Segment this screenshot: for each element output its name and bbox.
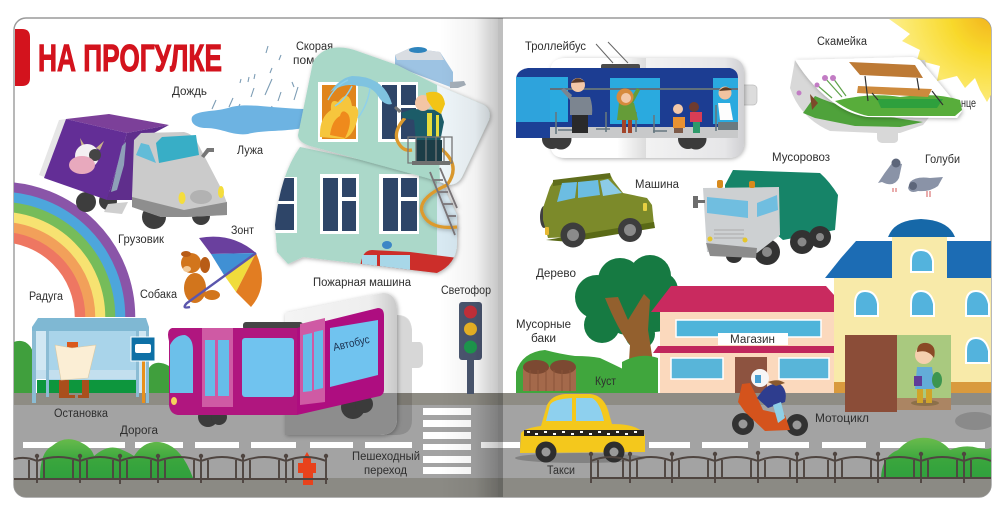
children	[673, 102, 702, 133]
street: pavement and road	[14, 393, 991, 497]
cab	[703, 187, 780, 253]
labels: left page: Дорога	[120, 425, 159, 437]
trolleybus	[516, 42, 738, 150]
labels: left page: Лужа	[237, 145, 264, 157]
ambulance card peeking	[395, 47, 466, 88]
labels hidden behind cards	[294, 42, 332, 64]
bushes behind bus stop	[14, 341, 169, 393]
awning	[653, 346, 834, 353]
boy	[911, 343, 942, 406]
man with newspaper	[55, 342, 96, 398]
labels: left page: Радуга	[29, 291, 64, 303]
card base	[790, 60, 935, 143]
fence	[589, 451, 991, 483]
title: НА ПРОГУЛКЕ	[38, 38, 222, 80]
windows	[855, 250, 989, 363]
rear wheels	[76, 192, 210, 229]
labels: right page: Дерево	[536, 268, 576, 280]
labels: left page: Дождь	[172, 86, 207, 98]
roof	[651, 286, 834, 312]
pigeons	[878, 158, 943, 197]
labels: left page: Остановка	[54, 408, 109, 420]
bush	[881, 438, 991, 478]
bus card backing	[285, 293, 423, 435]
labels: left page: Пешеходный	[352, 451, 420, 463]
umbrella handle	[185, 253, 256, 308]
labels: left page: Грузовик	[118, 234, 165, 246]
labels: right page: Голуби	[925, 154, 960, 166]
dog	[181, 251, 220, 303]
walls	[834, 278, 991, 393]
bins	[523, 367, 576, 391]
bush and fence right	[589, 438, 991, 483]
puddle	[192, 105, 304, 134]
dome	[888, 219, 955, 237]
labels: right page: Такси	[547, 465, 575, 477]
woman	[616, 88, 640, 133]
labels: right page: баки	[531, 333, 556, 345]
man	[561, 78, 592, 133]
rain	[212, 46, 298, 115]
doors	[202, 328, 233, 407]
labels: left page: Зонт	[231, 225, 255, 237]
burning window	[318, 82, 358, 142]
spine shadow	[440, 18, 503, 497]
labels hidden behind cards: помощь	[293, 55, 337, 67]
bus stop sign	[131, 337, 155, 403]
red title tab	[15, 29, 30, 86]
crown	[575, 255, 678, 349]
front body	[168, 328, 297, 415]
sun label piece: нце	[961, 98, 976, 110]
curled flap	[795, 57, 962, 118]
upper window	[676, 320, 821, 337]
manhole	[955, 412, 995, 430]
labels hidden behind cards: Скорая	[296, 41, 333, 53]
fire scene card: upper	[298, 48, 490, 235]
sign	[718, 333, 788, 345]
labels: right page: Мотоцикл	[815, 413, 869, 425]
umbrella canopy	[199, 237, 256, 254]
bush and bins	[516, 350, 658, 393]
hose and ladder	[396, 118, 457, 227]
bus label: Автобус	[332, 334, 371, 354]
labels: left page: Пожарная машина	[313, 277, 412, 289]
firefighter	[394, 92, 452, 165]
labels: right page: Машина	[635, 179, 680, 191]
bus	[168, 308, 384, 427]
rider	[751, 369, 786, 423]
bench card	[790, 57, 962, 143]
sun	[889, 18, 991, 102]
labels: right page: Троллейбус	[525, 41, 586, 53]
labels: right page	[516, 41, 960, 477]
second window	[378, 82, 418, 142]
green doorway	[897, 335, 951, 398]
labels: right page: Мусорные	[516, 319, 571, 331]
tree	[575, 255, 678, 393]
roofs	[825, 241, 892, 278]
labels: left page: переход	[364, 465, 407, 477]
plinth	[834, 382, 991, 393]
shop windows	[671, 358, 723, 379]
labels: right page: Мусоровоз	[772, 152, 830, 164]
door	[845, 335, 897, 412]
driver	[718, 86, 738, 130]
lower windows	[270, 174, 419, 234]
building	[825, 219, 991, 412]
lower grass	[803, 96, 923, 127]
poles	[596, 42, 628, 63]
cargo box	[66, 114, 169, 133]
labels: left page	[29, 86, 491, 477]
container	[725, 170, 838, 240]
windows	[242, 338, 294, 397]
bush	[516, 350, 627, 393]
trolleybus card backing	[550, 58, 757, 158]
green car	[540, 173, 655, 248]
labels: left page: Собака	[140, 289, 178, 301]
bush	[40, 439, 193, 478]
hydrant	[298, 452, 316, 485]
rainbow	[14, 182, 136, 317]
truck	[39, 114, 227, 229]
labels: right page: Куст	[595, 376, 617, 388]
fire truck	[360, 241, 454, 273]
umbrella and dog	[181, 237, 262, 308]
rear body	[297, 308, 384, 415]
fence	[14, 454, 328, 484]
taxi	[515, 394, 645, 463]
bench label: Скамейка	[817, 36, 868, 48]
bench	[849, 62, 923, 78]
shop	[651, 286, 834, 393]
wheels	[754, 226, 831, 265]
labels: left page: Светофор	[441, 285, 491, 297]
cab	[132, 132, 227, 217]
wheels	[542, 128, 706, 150]
door	[735, 357, 767, 393]
trunk	[605, 294, 658, 393]
labels: right page: Магазин	[730, 334, 775, 346]
seats	[556, 105, 716, 134]
fire truck card: lower	[270, 147, 459, 280]
body	[516, 68, 738, 138]
bus stop	[32, 318, 155, 403]
water spray	[330, 76, 392, 104]
cow head	[69, 138, 104, 174]
motorcycle	[732, 369, 808, 436]
flowers	[817, 78, 846, 98]
wheels	[198, 395, 373, 427]
traffic light	[459, 302, 482, 394]
bush and fence left	[14, 439, 328, 485]
garbage truck	[693, 170, 838, 265]
windows	[550, 77, 738, 124]
